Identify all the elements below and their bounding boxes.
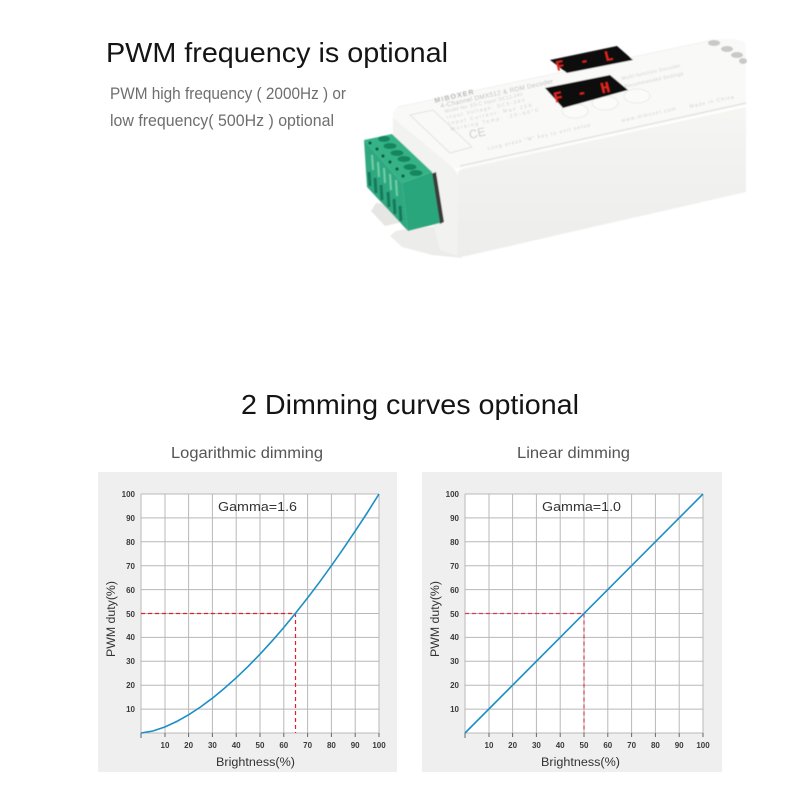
x axis labels: 10 bbox=[161, 741, 170, 750]
x axis labels: 80 bbox=[327, 741, 336, 750]
device label text: Multi-function Decoder bbox=[621, 63, 681, 82]
y axis labels: 100 bbox=[446, 490, 460, 499]
y axis title: PWM duty(%) bbox=[106, 581, 118, 657]
display: F-H bbox=[545, 75, 628, 108]
x axis labels bbox=[161, 741, 386, 750]
green terminal connector bbox=[364, 134, 444, 231]
x axis labels: 10 bbox=[485, 741, 494, 750]
y axis labels: 80 bbox=[450, 538, 460, 547]
x axis title: Brightness(%) bbox=[541, 757, 620, 769]
y axis labels: 10 bbox=[126, 705, 136, 714]
y axis labels: 90 bbox=[126, 514, 136, 523]
y axis labels: 20 bbox=[126, 681, 136, 690]
y axis labels: 60 bbox=[450, 586, 460, 595]
red dashed guide bbox=[141, 614, 296, 733]
heading: dimming curves: 2 Dimming curves optional bbox=[241, 389, 579, 420]
terminal holes on back bbox=[708, 40, 747, 64]
device label text: Input Current: Max 20A bbox=[448, 103, 533, 127]
y axis labels: 30 bbox=[450, 657, 460, 666]
x axis labels: 30 bbox=[532, 741, 541, 750]
device label text bbox=[434, 63, 735, 152]
y axis labels: 100 bbox=[122, 490, 136, 499]
device label text: Recommended Settings bbox=[624, 71, 684, 90]
x axis labels bbox=[485, 741, 710, 750]
product image: decoder device bbox=[364, 39, 747, 258]
y axis labels: 50 bbox=[450, 610, 460, 619]
y axis labels: 80 bbox=[126, 538, 136, 547]
x axis labels: 50 bbox=[580, 741, 589, 750]
x axis labels: 20 bbox=[508, 741, 518, 750]
x axis title: Brightness(%) bbox=[216, 757, 295, 769]
y axis labels: 20 bbox=[450, 681, 460, 690]
device label panel bbox=[410, 110, 472, 153]
gamma label: Gamma=1.6 bbox=[218, 499, 297, 514]
gamma label: Gamma=1.0 bbox=[542, 499, 621, 514]
text block: PWM description bbox=[110, 85, 346, 130]
panel: logarithmic chart bbox=[98, 472, 397, 772]
x axis labels: 90 bbox=[675, 741, 684, 750]
x axis labels: 100 bbox=[372, 741, 386, 750]
y axis labels: 40 bbox=[126, 633, 136, 642]
display: F-L: F - L bbox=[554, 48, 619, 76]
device label text: 4-Channel DMX512 & RDM Decoder bbox=[440, 78, 555, 110]
device label text: www.miboxer.com bbox=[621, 106, 676, 124]
device label text: Input Voltage: DC5-24V bbox=[446, 98, 526, 121]
y axis labels: 70 bbox=[450, 562, 460, 571]
y axis labels: 30 bbox=[126, 657, 136, 666]
red dashed guide bbox=[465, 614, 584, 733]
x axis labels: 70 bbox=[303, 741, 313, 750]
title: PWM frequency: PWM frequency is optional bbox=[106, 37, 448, 68]
x axis labels: 90 bbox=[351, 741, 360, 750]
device label text: Made in China bbox=[689, 94, 735, 110]
x axis labels: 80 bbox=[651, 741, 660, 750]
x axis labels: 20 bbox=[184, 741, 194, 750]
blue gamma curve bbox=[141, 494, 379, 733]
y axis labels bbox=[122, 490, 136, 714]
device label text: Long press "M" key to exit setup bbox=[487, 122, 591, 152]
x axis labels: 60 bbox=[603, 741, 613, 750]
y axis labels: 70 bbox=[126, 562, 136, 571]
device label text: CE bbox=[468, 125, 487, 142]
device label text: Model No: ES-C Input: DC12-24V bbox=[444, 92, 524, 115]
text block: PWM description: low frequency( 500Hz ) optional bbox=[110, 112, 334, 130]
x axis labels: 40 bbox=[232, 741, 241, 750]
y axis labels: 90 bbox=[450, 514, 460, 523]
blue linear line bbox=[465, 494, 703, 733]
y axis title: PWM duty(%) bbox=[430, 581, 442, 657]
x axis labels: 30 bbox=[208, 741, 217, 750]
x axis labels: 50 bbox=[256, 741, 265, 750]
x axis labels: 100 bbox=[696, 741, 710, 750]
device label text: Working Temp: -20~60°C bbox=[450, 108, 540, 133]
x axis labels: 60 bbox=[279, 741, 289, 750]
display: F-H: F - H bbox=[552, 78, 615, 108]
y axis labels: 40 bbox=[450, 633, 460, 642]
device buttons bbox=[562, 89, 650, 118]
heading: logarithmic dimming: Logarithmic dimming bbox=[171, 445, 323, 462]
device body bbox=[393, 39, 746, 256]
heading: linear dimming: Linear dimming bbox=[517, 445, 630, 462]
x axis labels: 40 bbox=[556, 741, 565, 750]
y axis labels bbox=[446, 490, 460, 714]
y axis labels: 50 bbox=[126, 610, 136, 619]
y axis labels: 10 bbox=[450, 705, 460, 714]
x axis labels: 70 bbox=[627, 741, 637, 750]
mounting feet bbox=[371, 203, 462, 258]
panel: linear chart bbox=[422, 472, 722, 772]
y axis labels: 60 bbox=[126, 586, 136, 595]
text block: PWM description: PWM high frequency ( 2000Hz ) or bbox=[110, 85, 346, 103]
device label text: MiBOXER bbox=[434, 89, 474, 105]
